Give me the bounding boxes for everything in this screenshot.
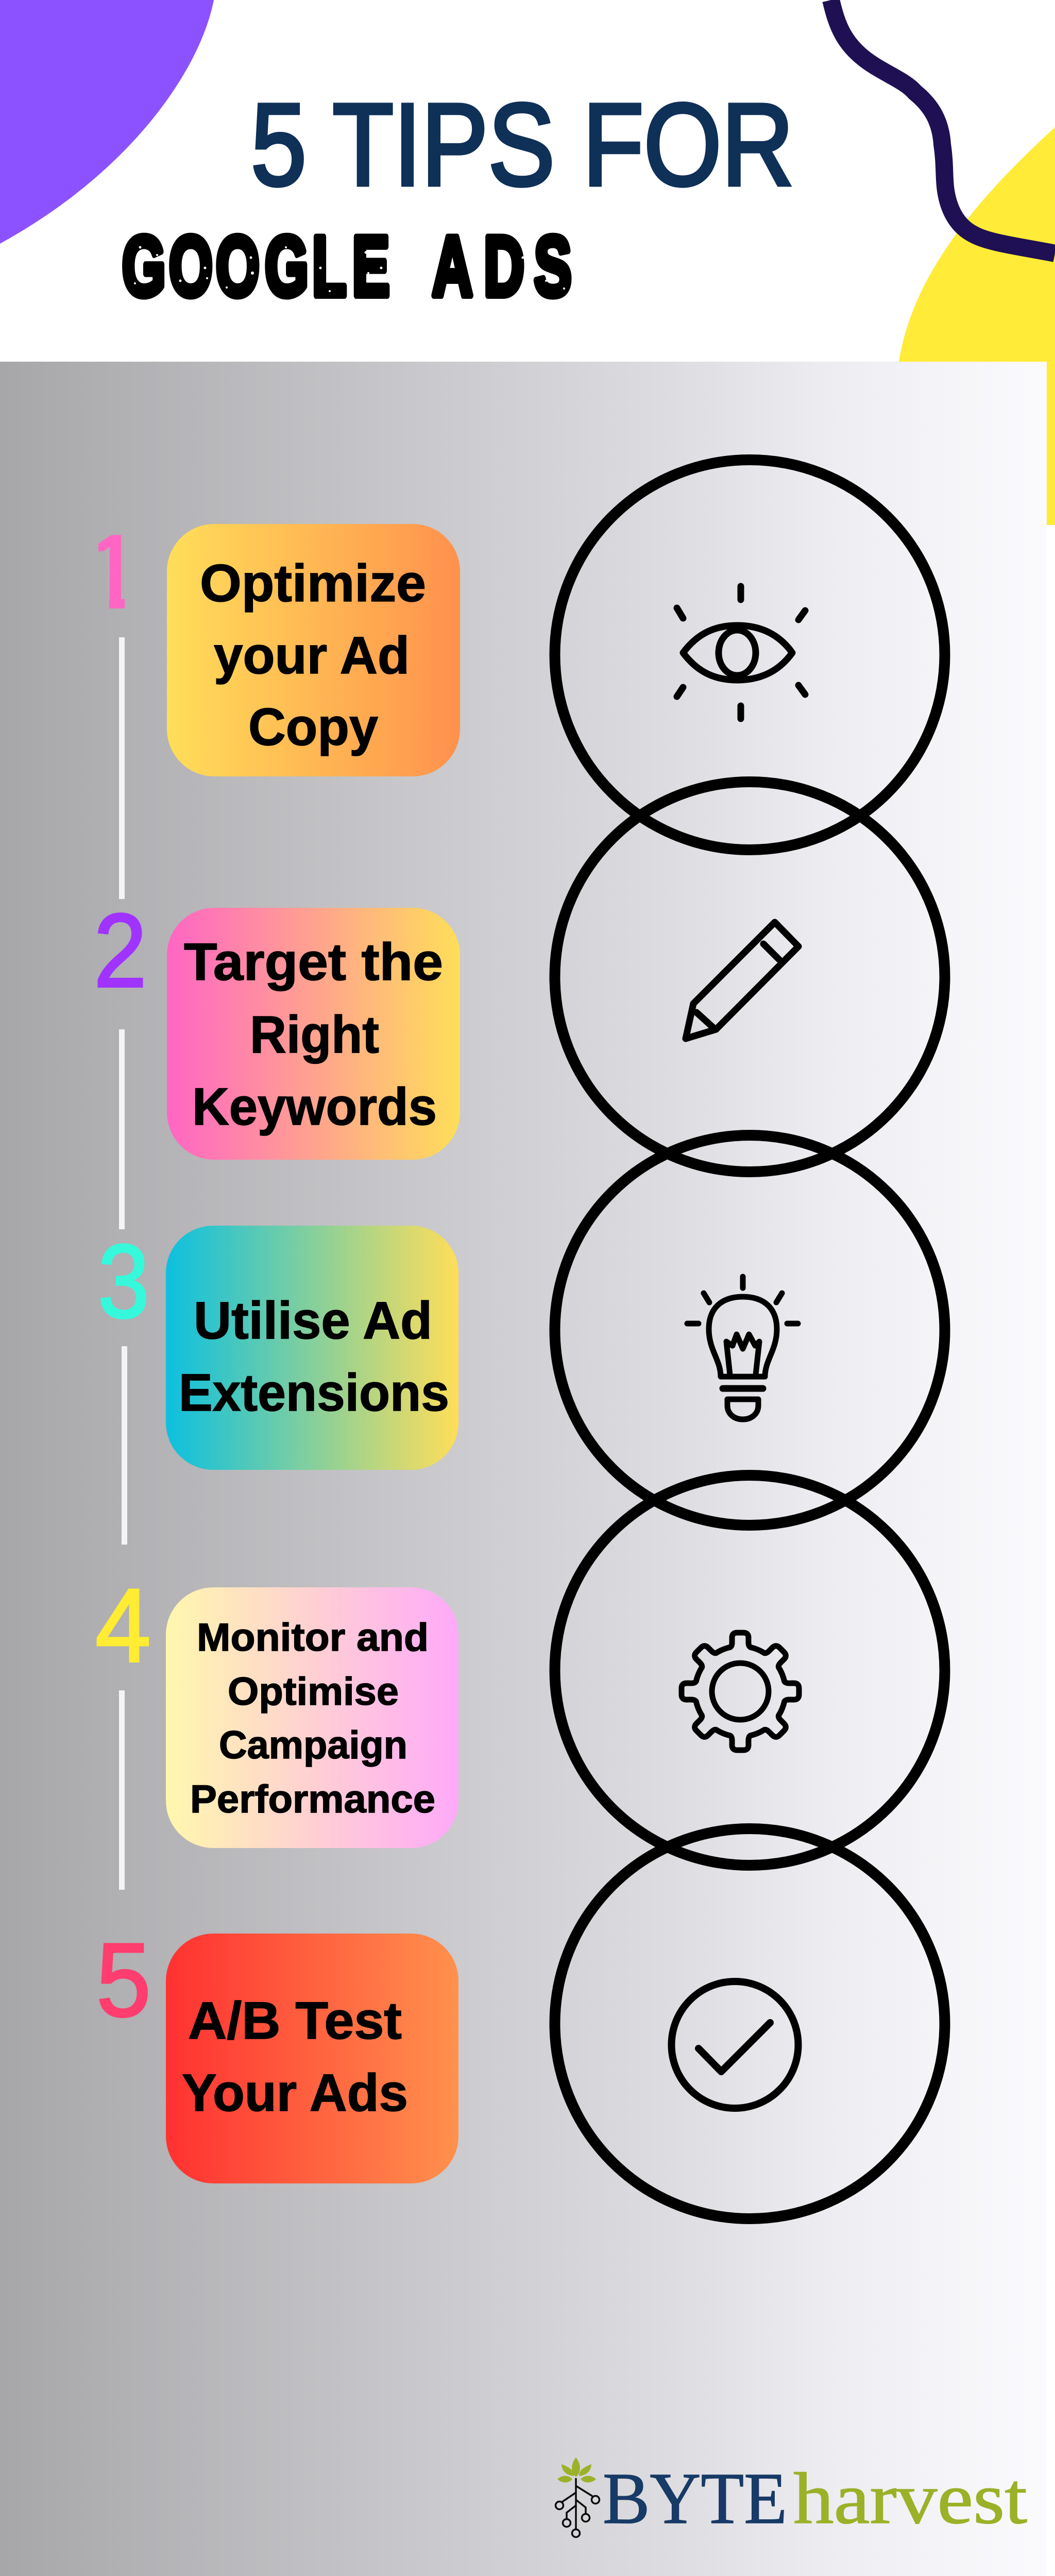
circle 3 (555, 1136, 945, 1525)
number 5: 5 (96, 1922, 151, 2039)
icon: light bulb (687, 1277, 798, 1419)
circle 4 (555, 1476, 945, 1865)
icon: check mark in circle (672, 1981, 798, 2108)
icon: eye (677, 586, 805, 719)
tip card 2: Right (250, 1005, 379, 1064)
tip card 2: Target the (184, 933, 443, 991)
tip card 4 (166, 1587, 458, 1848)
tip card 4: Performance (190, 1777, 435, 1821)
connector lines (119, 637, 127, 1890)
title: 5 TIPS FOR: 5 TIPS FOR (251, 80, 794, 210)
tip card 2: Keywords (192, 1077, 437, 1136)
tip card 5 (166, 1934, 458, 2183)
distress specks on title (134, 246, 565, 292)
number 1: 1 (84, 514, 143, 631)
tip card 1 (167, 524, 460, 776)
tip card 1: your Ad (214, 626, 410, 685)
circle 1 (555, 460, 945, 850)
shape: yellow circle (899, 127, 1055, 525)
tip card 4: Monitor and (197, 1616, 429, 1659)
tip card 5: A/B Test (188, 1991, 402, 2050)
shape: navy wave (831, 0, 1055, 253)
icon: gear (682, 1633, 799, 1750)
title: GOOGLE ADS: GOOGLE ADS (122, 218, 571, 314)
logo word harvest: harvest (793, 2458, 1027, 2539)
circle 5 (555, 1829, 945, 2218)
icon: pencil (686, 922, 798, 1039)
shape: purple quarter circle (0, 0, 214, 244)
logo plant icon (555, 2458, 600, 2537)
number 2: 2 (94, 892, 147, 1009)
logo: BYTEharvest (555, 2458, 1027, 2539)
circle 2 (555, 782, 945, 1172)
tip card 3 (166, 1226, 458, 1470)
tip card 1: Copy (248, 698, 378, 756)
number 4: 4 (95, 1567, 151, 1684)
tip card 3: Extensions (179, 1363, 449, 1422)
circles (555, 460, 945, 2218)
tip card 2 (167, 908, 460, 1160)
tip card 4: Optimise (228, 1670, 399, 1714)
tip card 4: Campaign (219, 1723, 407, 1767)
logo word BYTE: BYTE (603, 2458, 787, 2539)
number 3: 3 (98, 1223, 149, 1340)
tip card 1: Optimize (200, 554, 426, 613)
tip card 3: Utilise Ad (194, 1291, 432, 1350)
tip card 5: Your Ads (182, 2063, 408, 2122)
